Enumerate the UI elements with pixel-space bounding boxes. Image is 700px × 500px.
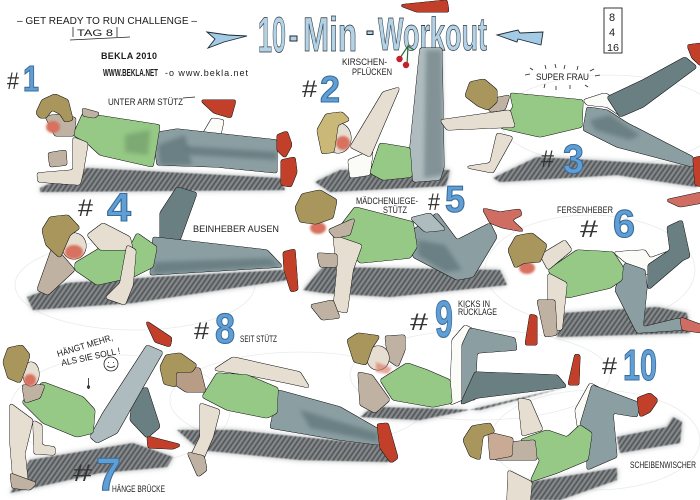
torso [348,143,412,180]
label: RÜCKLAGE [458,307,497,317]
shirt [22,382,95,437]
number 8: # [194,318,210,345]
exercise 10: Scheibenwischer [463,341,696,500]
shirt [548,250,623,298]
head [295,190,337,234]
label [356,196,418,215]
title: 10 [258,7,286,63]
head [347,333,392,374]
number 1 [7,58,39,99]
shadow [40,168,285,192]
number 6 [580,203,635,246]
arrow: right pointing [207,32,247,48]
legs [153,129,277,173]
shirt [380,363,452,407]
number 1: 1 [23,58,39,99]
shadow [360,387,567,420]
number 7 [73,448,121,500]
icon: smiley and arrow [87,357,118,389]
number 6: 6 [613,203,635,246]
speech note [56,332,121,368]
shoes [145,320,182,449]
head [3,345,45,403]
timing box 8 4 16: 4 [609,27,615,39]
arm [37,108,100,185]
number 10: # [602,353,618,380]
number 3: 3 [563,136,584,182]
shadow [523,417,682,500]
legs [90,345,163,443]
shirt [520,425,592,482]
credits [101,51,248,79]
number 7: 7 [96,448,121,500]
credit url: -o www.bekla.net [165,68,248,78]
shadow [27,270,287,310]
day label box [70,27,130,40]
arm [495,440,537,500]
arm [310,218,362,320]
exercise 3: Superfrau [440,43,700,187]
shirt [335,207,417,263]
number 4 [78,186,132,230]
top arm [213,357,310,388]
shadow [493,157,697,187]
label: FERSENHEBER [557,205,613,215]
label: KICKS IN [458,299,490,309]
exercise 6: Fersenheber [508,192,700,337]
exercise 2: Kirschenpflücken [302,0,450,192]
number 4: 4 [107,186,132,230]
number 4: # [78,195,94,222]
credit site bold: WWW.BEKLA.NET [103,68,158,79]
timing box 8 4 16: 16 [607,43,619,54]
raised foot [200,100,236,138]
speech note: HÄNGT MEHR, [56,332,114,359]
exercise 8: Seitstütz [160,305,398,477]
timing box 8 4 16 [604,8,622,54]
legs [613,220,690,333]
arms [37,223,136,305]
header: challenge title [17,16,197,40]
head [508,233,547,274]
number 9 [410,291,453,349]
label: HÄNGE BRÜCKE [112,484,165,494]
label with rays [525,64,600,90]
arrow: left pointing [497,30,543,45]
number 10 [602,341,657,390]
number 7: # [73,460,93,487]
label: STÜTZ [383,205,407,215]
legs [410,213,497,280]
number 5 [428,179,465,220]
legs [583,57,697,167]
arms [10,403,55,490]
shadow [303,267,507,297]
label: PFLÜCKEN [352,67,392,77]
number 5: # [428,189,441,216]
label: UNTER ARM STÜTZ [108,97,183,107]
title: Workout [378,8,487,60]
number 2 [302,69,340,110]
exercise 4: Beinheber außen [27,186,298,310]
arms [440,110,515,173]
legs [450,325,567,405]
shoe on top [398,0,449,12]
icon: cherries [396,46,414,68]
label: KIRSCHEN- [342,57,387,67]
number 2: # [302,76,318,103]
number 8: 8 [215,305,235,353]
shoes [687,43,700,187]
number 3 [541,136,584,182]
timing box 8 4 16: 8 [609,12,615,24]
number 3: # [541,146,555,173]
number 9: 9 [435,291,453,349]
arm [358,335,405,413]
head [160,353,206,392]
number 6: # [580,216,599,243]
shoe [637,393,658,417]
shirt [73,113,160,167]
speech note: ALS SIE SOLL ! [60,346,121,368]
exercise 1: Unterarmstütz [7,58,297,192]
support arm [187,403,220,477]
number 1: # [7,68,20,95]
shoe [377,423,398,463]
shirt [202,373,278,418]
legs [410,48,444,182]
number 5: 5 [445,179,465,220]
label [458,299,497,317]
shoe [482,208,525,232]
number 2: 2 [320,69,340,110]
legs [150,187,283,275]
exercise 5: Mädchenliegestütz [295,179,525,320]
number 8 [194,305,235,353]
day label box: TAG 8 [77,28,113,38]
shirt [75,233,157,285]
legs [575,383,640,470]
legs [270,390,380,445]
head [42,215,86,259]
shirt [500,93,583,137]
feet [277,131,297,187]
label: BEINHEBER AUSEN [193,224,279,234]
shadow [315,170,450,192]
number 9: # [410,309,429,336]
shadow [10,443,173,493]
label: SEIT STÜTZ [240,334,277,344]
head [463,423,513,460]
arm up [518,398,543,436]
challenge line: – GET READY TO RUN CHALLENGE – [17,16,197,27]
title [258,7,487,63]
number 10: 10 [623,341,657,390]
credit year: BEKLA 2010 [101,51,157,61]
label with rays: SUPER FRAU [536,72,589,82]
title: Min [303,9,357,62]
exercise 9: Kicks in Rücklage [347,291,580,420]
shoe [283,249,298,292]
head [36,94,76,136]
arm [537,240,572,337]
shadow [557,307,690,337]
shoes [665,192,700,333]
label [342,57,392,77]
exercise 7: Hänge Brücke [3,320,182,500]
shoes [525,314,580,385]
head [465,79,510,112]
label: MÄDCHENLIEGE- [356,196,418,206]
shadow [177,430,390,462]
arms [350,87,400,157]
head [317,112,351,154]
